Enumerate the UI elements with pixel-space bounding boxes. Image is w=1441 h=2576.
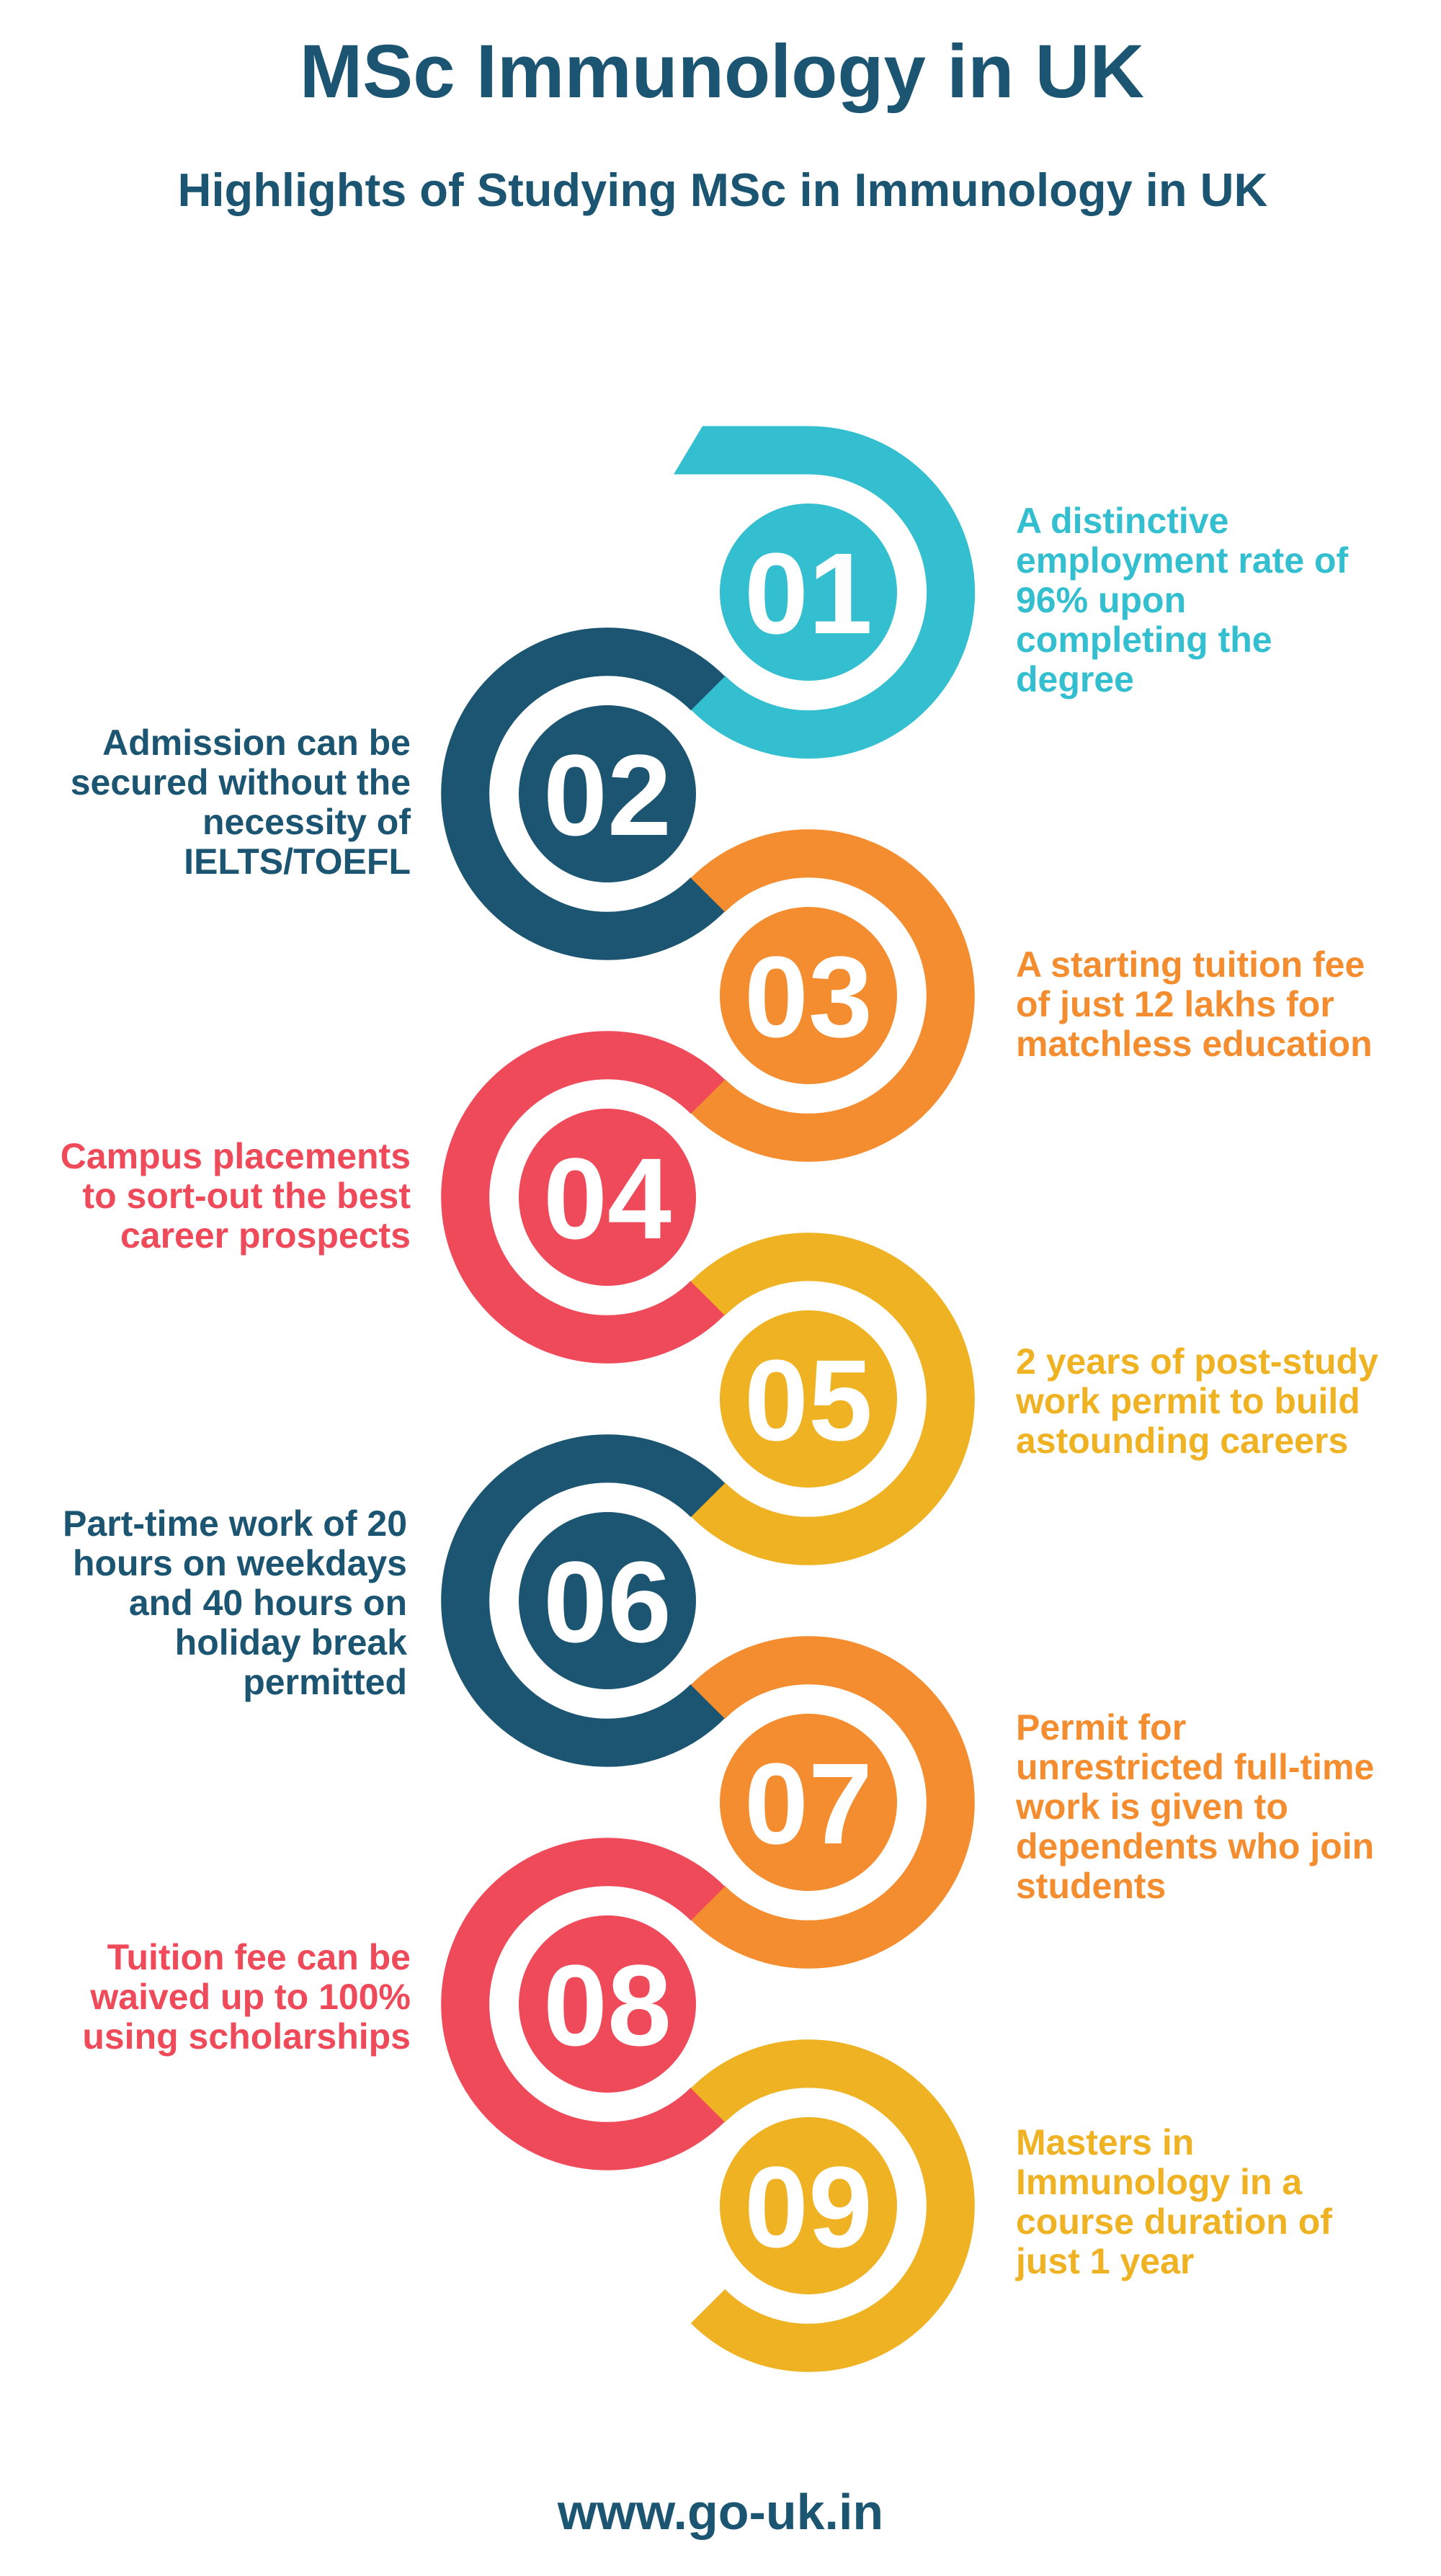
text 04: to sort-out the best	[82, 1176, 411, 1216]
ring 09	[708, 2064, 950, 2348]
text 09: Masters in	[1016, 2122, 1194, 2163]
item 03	[708, 854, 1373, 1137]
badge 09	[720, 2117, 897, 2294]
badge 05	[720, 1310, 897, 1488]
text 01: A distinctive	[1016, 501, 1228, 541]
badge 02	[519, 705, 696, 882]
item 09	[708, 2064, 1332, 2348]
text 01: 96% upon	[1016, 580, 1186, 620]
badge 04	[519, 1109, 696, 1286]
text 07: dependents who join	[1016, 1826, 1374, 1866]
ring 03	[708, 854, 950, 1137]
item 02	[71, 652, 708, 936]
text 09: just 1 year	[1015, 2241, 1194, 2281]
item 07	[708, 1660, 1374, 1944]
text 08: using scholarships	[82, 2016, 411, 2057]
text 04: Campus placements	[61, 1136, 411, 1176]
badge 06	[519, 1512, 696, 1689]
badge 08	[519, 1915, 696, 2093]
text 01: degree	[1016, 659, 1134, 699]
text 05: astounding careers	[1016, 1421, 1348, 1461]
text 08: waived up to 100%	[89, 1977, 411, 2017]
text 09: Immunology in a	[1016, 2162, 1303, 2202]
item 05	[708, 1257, 1378, 1541]
text 03: of just 12 lakhs for	[1016, 984, 1334, 1024]
badge 03: 03	[744, 932, 873, 1061]
ring 08	[465, 1862, 708, 2146]
text 02: secured without the	[71, 762, 411, 802]
ring 06	[465, 1459, 708, 1743]
badge 01: 01	[744, 529, 873, 658]
badge 06: 06	[543, 1537, 672, 1666]
badge 01	[720, 504, 897, 681]
badge 04: 04	[543, 1134, 672, 1263]
text 06: holiday break	[175, 1622, 407, 1663]
text 06: and 40 hours on	[129, 1583, 407, 1623]
item 06	[63, 1459, 708, 1743]
text 06: permitted	[243, 1662, 407, 1702]
badge 07: 07	[744, 1739, 873, 1868]
ring 05	[708, 1257, 950, 1541]
ring 04	[465, 1055, 708, 1339]
item 08	[82, 1862, 708, 2146]
text 03: A starting tuition fee	[1016, 944, 1365, 985]
text 07: unrestricted full-time	[1016, 1747, 1374, 1787]
text 07: students	[1016, 1866, 1166, 1906]
ring 02	[465, 652, 708, 936]
text 09: course duration of	[1016, 2201, 1332, 2242]
badge 07	[720, 1714, 897, 1891]
badge 02: 02	[543, 730, 672, 859]
text 05: work permit to build	[1015, 1381, 1360, 1421]
title: MSc Immunology in UK	[300, 30, 1144, 114]
badge 05: 05	[744, 1336, 873, 1464]
subtitle: Highlights of Studying MSc in Immunology in UK	[178, 164, 1268, 216]
ring 07	[708, 1660, 950, 1944]
badge 09: 09	[744, 2142, 873, 2271]
text 07: work is given to	[1015, 1786, 1288, 1827]
badge 08: 08	[543, 1941, 672, 2070]
item 04	[61, 1055, 708, 1339]
item 01	[674, 426, 1349, 735]
footer url: www.go-uk.in	[557, 2484, 883, 2540]
text 01: completing the	[1016, 620, 1272, 660]
text 06: Part-time work of 20	[63, 1503, 407, 1544]
text 04: career prospects	[120, 1215, 411, 1256]
text 02: IELTS/TOEFL	[184, 841, 411, 882]
text 06: hours on weekdays	[73, 1543, 407, 1583]
text 02: necessity of	[202, 802, 411, 842]
text 08: Tuition fee can be	[107, 1937, 411, 1977]
text 03: matchless education	[1016, 1024, 1373, 1064]
ring 01	[674, 426, 951, 735]
text 02: Admission can be	[102, 723, 411, 763]
text 05: 2 years of post-study	[1016, 1341, 1378, 1382]
text 01: employment rate of	[1016, 540, 1349, 581]
text 07: Permit for	[1016, 1707, 1186, 1748]
badge 03	[720, 907, 897, 1084]
